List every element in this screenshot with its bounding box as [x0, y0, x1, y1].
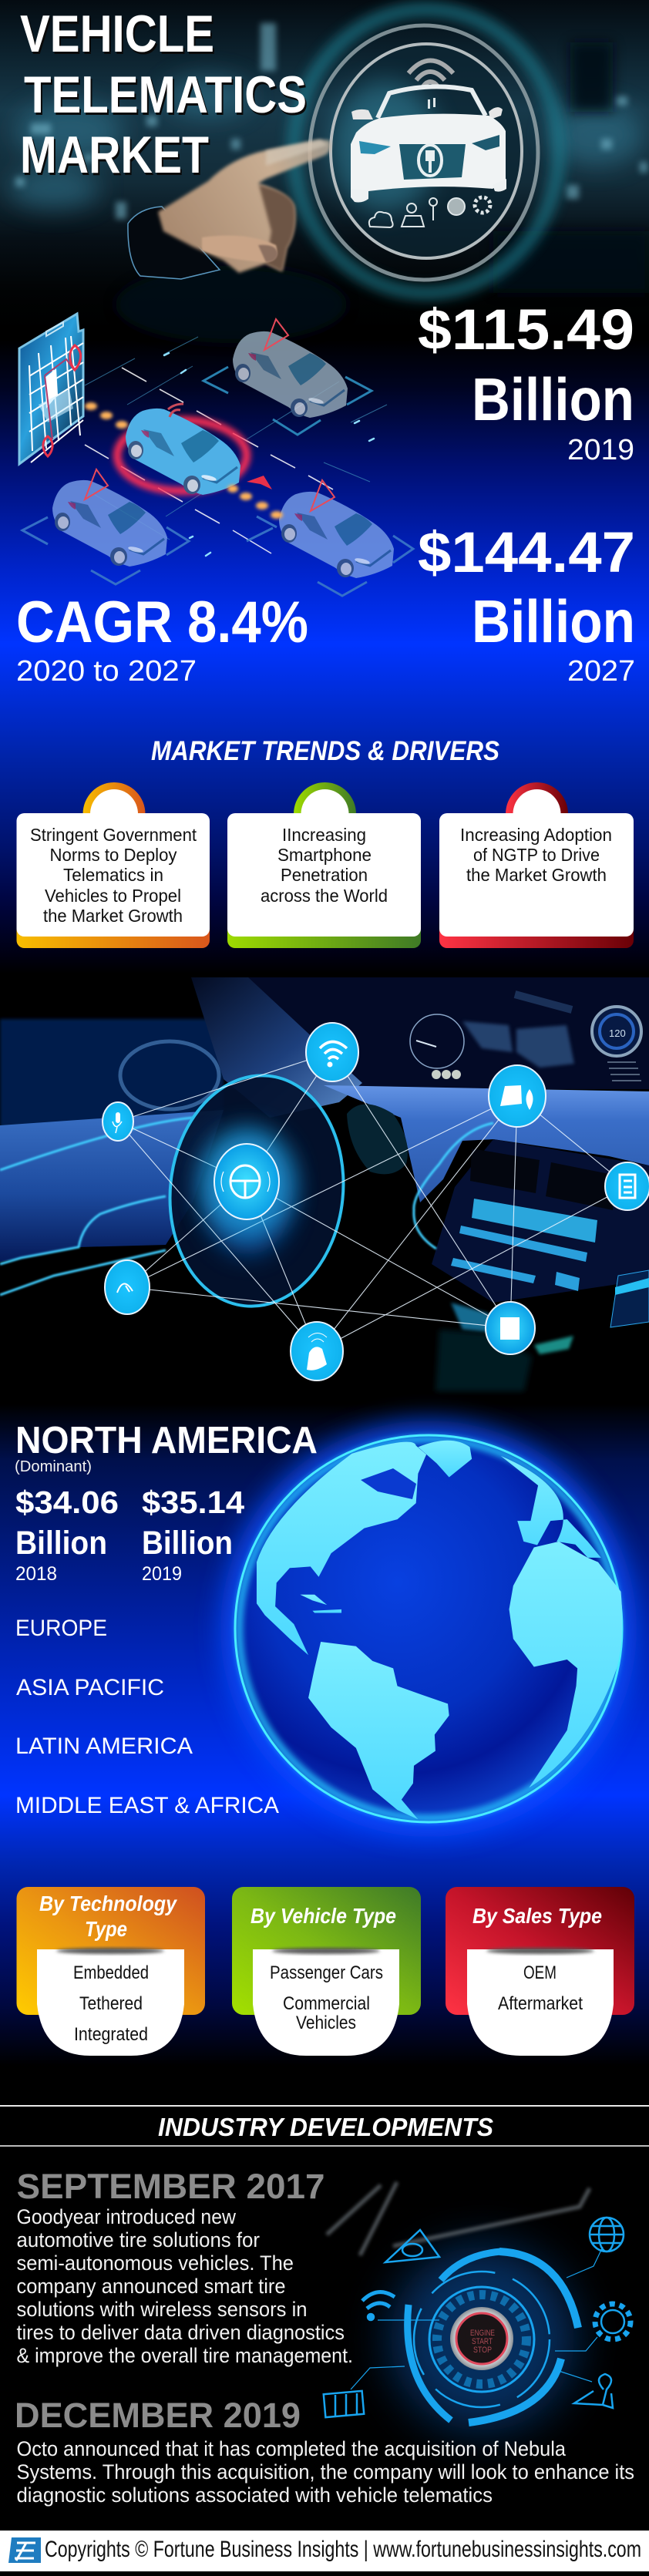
panel: by sales type: By Sales Type — [472, 1904, 602, 1928]
panel: by technology type: Type — [85, 1917, 127, 1941]
eurasia — [501, 1456, 601, 1558]
caribbean islands — [300, 1595, 341, 1613]
regions list: ASIA PACIFIC — [16, 1675, 164, 1700]
connected cars illustration — [19, 314, 413, 596]
title: MARKET — [20, 126, 209, 184]
africa — [509, 1542, 622, 1787]
icon: wifi signal — [409, 60, 453, 86]
side window — [0, 1019, 224, 1127]
panel: driver 2 — [227, 782, 421, 948]
windshield — [231, 977, 649, 1089]
september 2017 development: Goodyear introduced new — [17, 2205, 236, 2228]
panel: by sales type: Aftermarket — [498, 1993, 583, 2014]
start stop button: ENGINE — [470, 2329, 495, 2338]
node: battery — [605, 1162, 649, 1210]
market size 2019: 2019 — [567, 434, 634, 466]
warning triangles — [85, 319, 335, 511]
panel: driver 2: IIncreasing — [282, 825, 366, 845]
panel: by sales type — [446, 1887, 634, 2056]
node: map location — [489, 1065, 546, 1127]
pointing hand — [128, 140, 331, 279]
node: chip — [486, 1302, 535, 1354]
panel: driver 3 — [439, 782, 634, 948]
panel: by vehicle type — [232, 1887, 421, 2056]
september 2017 development — [17, 2167, 353, 2367]
north america regional value: 2019 — [142, 1563, 182, 1585]
node glow — [199, 1128, 294, 1236]
panel: driver 3: the Market Growth — [466, 865, 607, 885]
north america — [257, 1442, 426, 1655]
panel: driver 2: across the World — [261, 886, 388, 906]
panel: driver 2: Penetration — [281, 865, 368, 885]
panel: by vehicle type: By Vehicle Type — [251, 1904, 396, 1928]
september 2017 development: semi-autonomous vehicles. The — [17, 2251, 294, 2275]
title — [20, 5, 307, 184]
panel: by technology type: Integrated — [74, 2024, 148, 2045]
panel: by vehicle type: Vehicles — [296, 2013, 356, 2033]
panel: by technology type: Embedded — [73, 1962, 149, 1983]
A pillar — [191, 977, 362, 1118]
continents — [257, 1441, 622, 1819]
function icons — [324, 2218, 631, 2417]
heading: industry developments: INDUSTRY DEVELOPMENTS — [158, 2113, 493, 2141]
december 2019 development: Octo announced that it has completed the acquisition of Nebula — [17, 2437, 567, 2460]
panel: by sales type: OEM — [523, 1962, 557, 1983]
september 2017 development: tires to deliver data driven diagnostics — [17, 2321, 345, 2344]
side mirror — [120, 1041, 219, 1109]
start stop button: START — [472, 2337, 493, 2346]
panel: driver 1: Vehicles to Propel — [45, 886, 181, 906]
start stop button: STOP — [473, 2346, 492, 2355]
september 2017 development: & improve the overall tire management. — [17, 2344, 353, 2367]
panel: driver 3: of NGTP to Drive — [473, 845, 600, 865]
footer — [0, 2531, 649, 2571]
node: car signal — [291, 1322, 343, 1380]
panel: driver 1: the Market Growth — [43, 906, 183, 926]
panel: by vehicle type: Passenger Cars — [270, 1962, 383, 1983]
december 2019 development: diagnostic solutions associated with vehicle telematics — [17, 2484, 493, 2507]
steering wheel — [159, 1067, 355, 1315]
engine start button graphic — [324, 2182, 631, 2431]
regions list — [15, 1616, 279, 1818]
panel: driver 1: Telematics in — [63, 865, 163, 885]
icon: white car front — [351, 86, 506, 202]
north america regional value: (Dominant) — [15, 1458, 92, 1475]
control rings — [351, 2247, 603, 2423]
panel: by technology type: Tethered — [79, 1993, 143, 2014]
title: VEHICLE — [20, 5, 214, 63]
regions list: EUROPE — [15, 1616, 107, 1641]
market size 2019 — [418, 298, 634, 466]
panel: driver 3: Increasing Adoption — [460, 825, 612, 845]
market size 2027: 2027 — [567, 655, 635, 688]
panel: driver 1: Stringent Government — [30, 825, 197, 845]
icon: Fortune Business Insights logo — [8, 2537, 41, 2563]
market size 2027: $144.47 — [418, 520, 635, 584]
north america regional value: Billion — [15, 1525, 107, 1562]
hudson bay — [361, 1468, 416, 1499]
connected car interior photo — [0, 977, 649, 1391]
panel: driver 1 — [17, 782, 210, 948]
north america regional value: 2018 — [15, 1563, 57, 1585]
CAGR: CAGR 8.4% — [16, 590, 308, 655]
september 2017 development: SEPTEMBER 2017 — [17, 2167, 325, 2206]
market size 2019: $115.49 — [418, 298, 634, 362]
south america — [308, 1642, 449, 1819]
panel: by vehicle type: Commercial — [283, 1993, 370, 2014]
road markings — [22, 337, 413, 596]
instrument binnacle — [347, 1104, 408, 1174]
september 2017 development: solutions with wireless sensors in — [17, 2298, 307, 2321]
panel: driver 1: Norms to Deploy — [49, 845, 177, 865]
dashboard trim — [327, 2182, 590, 2255]
node: wifi — [306, 1023, 358, 1081]
start stop button — [450, 2307, 513, 2370]
CAGR: 2020 to 2027 — [16, 655, 197, 688]
december 2019 development: DECEMBER 2019 — [15, 2396, 301, 2435]
door panel — [0, 1110, 224, 1262]
market size 2027 — [418, 520, 635, 688]
telematics hologram circle with car — [294, 9, 559, 293]
greenland — [418, 1441, 472, 1477]
september 2017 development: company announced smart tire — [17, 2275, 285, 2298]
map phone — [19, 314, 83, 464]
signal and navigation markers — [85, 402, 283, 519]
north america regional value: $35.14 — [142, 1485, 244, 1520]
HUD display elements: 120 — [609, 1027, 626, 1039]
node: microphone — [103, 1102, 133, 1141]
node: speed gauge — [105, 1260, 150, 1314]
panel: driver 2: Smartphone — [277, 845, 372, 865]
icons: weather, map pin, key, globe, gear — [369, 197, 490, 227]
network links — [118, 1052, 627, 1351]
hero photo: city background — [0, 0, 649, 343]
december 2019 development — [15, 2396, 634, 2507]
panel: by technology type: By Technology — [39, 1892, 177, 1915]
regions list: MIDDLE EAST & AFRICA — [15, 1793, 279, 1818]
september 2017 development: automotive tire solutions for — [17, 2228, 260, 2251]
title: TELEMATICS — [24, 66, 307, 124]
regions list: LATIN AMERICA — [15, 1734, 193, 1759]
north america regional value — [15, 1420, 318, 1585]
dashboard top — [324, 1085, 649, 1202]
regional globe — [220, 1421, 637, 1837]
north america regional value: NORTH AMERICA — [15, 1420, 318, 1461]
CAGR — [16, 590, 308, 688]
heading: market trends and drivers: MARKET TRENDS & DRIVERS — [151, 736, 499, 766]
HUD display elements — [410, 994, 641, 1081]
north america regional value: Billion — [142, 1525, 233, 1562]
neon interior lines — [0, 1118, 493, 1295]
alert ring around main car — [117, 420, 247, 491]
panel: by technology type — [17, 1887, 205, 2056]
node: steering — [214, 1144, 279, 1219]
north america regional value: $34.06 — [15, 1485, 119, 1520]
center console — [432, 1139, 649, 1391]
surrounding cars — [233, 331, 348, 418]
main blue car — [126, 409, 240, 495]
